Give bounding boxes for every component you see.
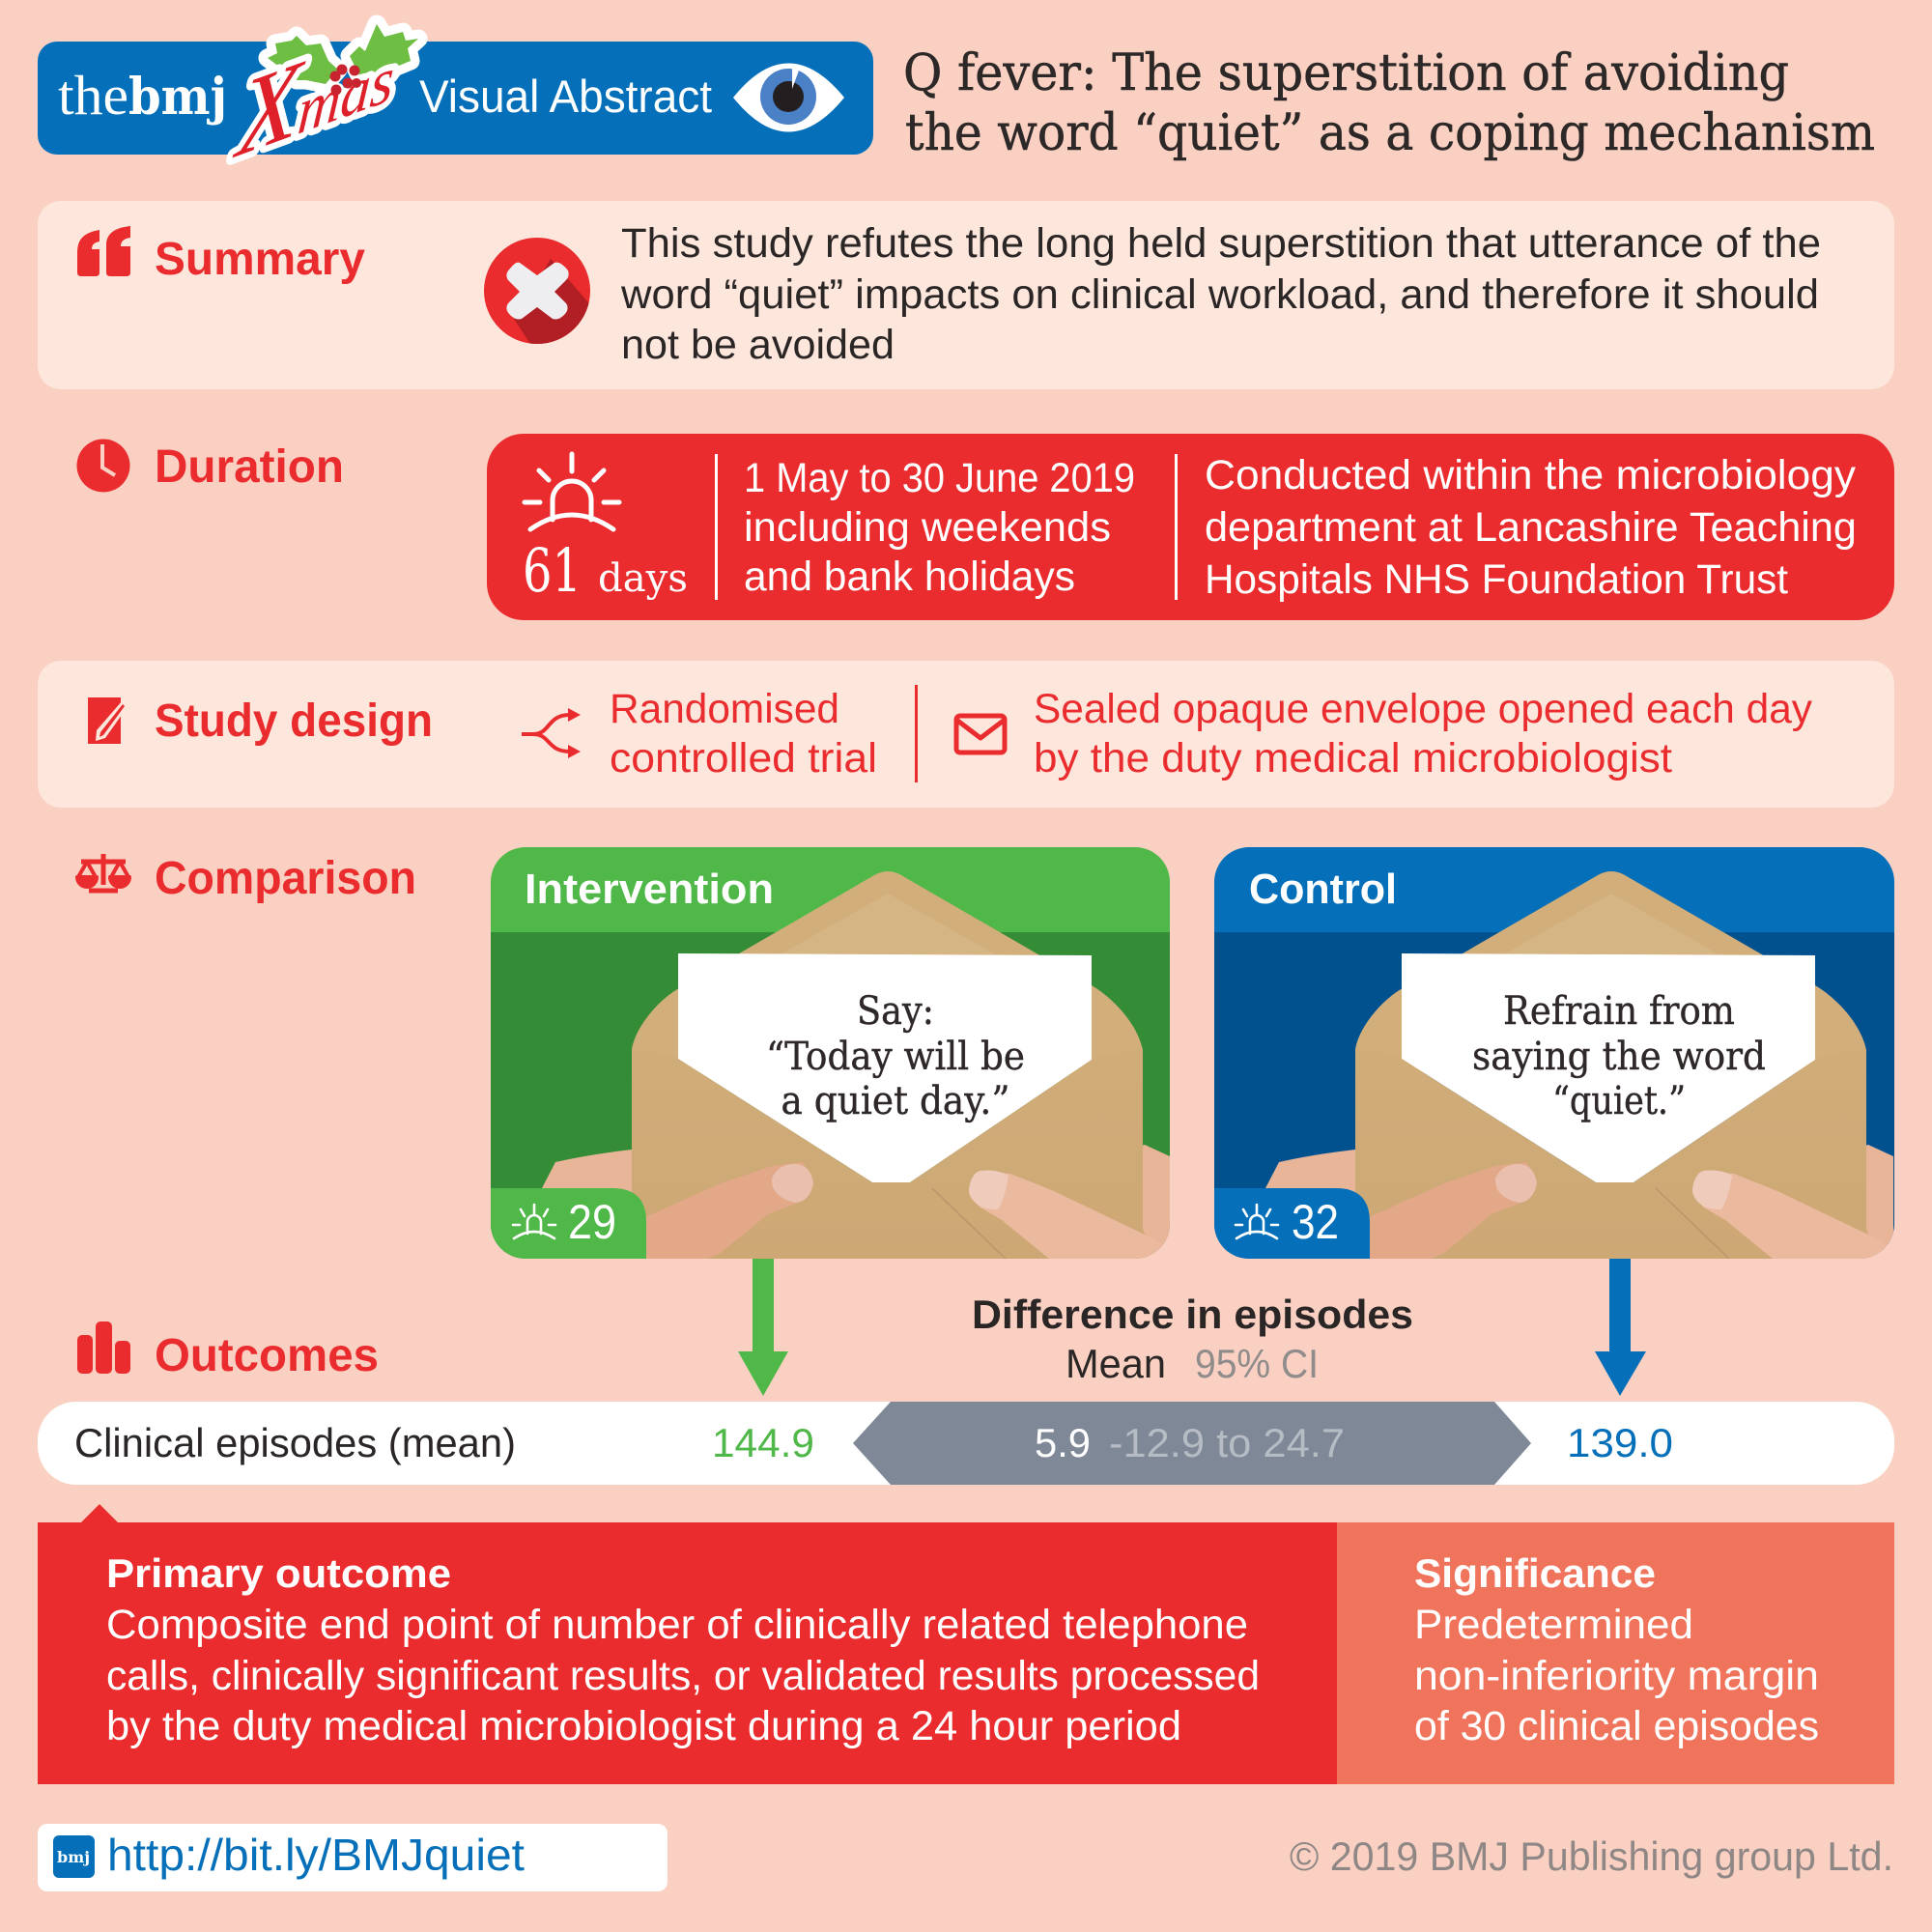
- panel: intervention: [491, 847, 1170, 1259]
- icon: quote marks: [77, 226, 130, 276]
- icon: eye: [733, 64, 844, 131]
- primary outcome text: calls, clinically significant results, or validated results processed: [106, 1653, 1260, 1699]
- panel: duration: days: [598, 556, 688, 601]
- icon: envelope: [956, 716, 1005, 753]
- note text: “quiet.”: [1552, 1079, 1686, 1123]
- randomised text: Randomised: [610, 686, 839, 732]
- title: [903, 44, 1875, 162]
- heading: Comparison: Comparison: [155, 853, 416, 904]
- significance text: Predetermined: [1414, 1602, 1693, 1648]
- difference heading: [972, 1292, 1413, 1386]
- icon: randomisation arrows: [522, 708, 581, 758]
- summary text: [620, 220, 1821, 368]
- dates text: [744, 455, 1135, 600]
- icon: bmj logo: [53, 1835, 95, 1878]
- arrow: control to result: [1595, 1259, 1646, 1396]
- panel: control: [1214, 847, 1894, 1259]
- significance text: of 30 clinical episodes: [1414, 1703, 1819, 1749]
- note text: a quiet day.”: [781, 1079, 1010, 1123]
- envelope photo: [1265, 871, 1893, 1259]
- panel: primary outcome: [38, 1504, 1337, 1784]
- setting text: Hospitals NHS Foundation Trust: [1205, 556, 1788, 603]
- note text: Refrain from: [1503, 989, 1735, 1034]
- days badge: [1214, 1188, 1370, 1259]
- heading: Duration: Duration: [155, 441, 344, 493]
- difference value: -12.9 to 24.7: [1109, 1420, 1345, 1465]
- significance text: non-inferiority margin: [1414, 1653, 1819, 1699]
- significance heading: Significance: [1414, 1550, 1656, 1596]
- 61 days: 61: [523, 535, 582, 606]
- icon: cross: [484, 238, 590, 344]
- arrow: intervention to result: [738, 1259, 788, 1396]
- Visual Abstract label: Visual Abstract: [419, 71, 712, 122]
- note text: [766, 989, 1025, 1123]
- heading: Summary: Summary: [155, 234, 365, 285]
- setting text: Conducted within the microbiology: [1205, 452, 1857, 498]
- panel: significance: [1337, 1522, 1894, 1784]
- control heading: Control: [1249, 866, 1397, 913]
- url: http://bit.ly/BMJquiet: [107, 1830, 525, 1880]
- panel: summary: [38, 201, 1894, 389]
- intervention heading: Intervention: [525, 866, 774, 913]
- control value: 139.0: [1567, 1420, 1673, 1465]
- heading: Outcomes: Outcomes: [155, 1330, 379, 1381]
- copyright: © 2019 BMJ Publishing group Ltd.: [1290, 1833, 1893, 1879]
- randomised text: controlled trial: [610, 735, 877, 781]
- bmj logo: [58, 64, 227, 127]
- note text: saying the word: [1472, 1035, 1766, 1079]
- icon: clock: [77, 439, 129, 493]
- days badge: [491, 1188, 646, 1259]
- note text: “Today will be: [766, 1035, 1025, 1079]
- summary text: word “quiet” impacts on clinical workload, and therefore it should: [620, 271, 1819, 318]
- difference heading: Mean: [1065, 1341, 1166, 1386]
- randomised text: [610, 686, 877, 781]
- link box: [38, 1824, 668, 1891]
- icon: sun: [525, 454, 619, 529]
- difference value: [853, 1402, 1531, 1485]
- heading: Study design: Study design: [155, 696, 433, 747]
- summary text: not be avoided: [621, 322, 895, 368]
- outcome label: Clinical episodes (mean): [74, 1420, 516, 1465]
- icon: scales: [77, 854, 129, 891]
- primary outcome text: by the duty medical microbiologist during a 24 hour period: [106, 1703, 1181, 1749]
- primary outcome text: [106, 1602, 1260, 1749]
- note text: Say:: [857, 989, 934, 1034]
- primary outcome heading: Primary outcome: [106, 1550, 451, 1596]
- bmj logo: the: [58, 64, 128, 127]
- dates text: including weekends: [744, 504, 1111, 551]
- dates text: 1 May to 30 June 2019: [744, 455, 1135, 501]
- note text: [1472, 989, 1766, 1123]
- envelope photo: [542, 871, 1170, 1259]
- summary text: This study refutes the long held superstition that utterance of the: [621, 220, 1821, 267]
- days badge: 32: [1292, 1195, 1339, 1249]
- bmj logo: bmj: [128, 68, 227, 127]
- header banner: [38, 1, 873, 182]
- difference heading: 95% CI: [1195, 1341, 1319, 1386]
- envelope text: by the duty medical microbiologist: [1034, 735, 1672, 781]
- panel: duration: [487, 434, 1894, 620]
- holly berries: [330, 64, 361, 95]
- envelope text: [1034, 686, 1812, 781]
- outcome bar: [38, 1402, 1894, 1485]
- icon: bar chart: [77, 1321, 130, 1374]
- title: Q fever: The superstition of avoiding: [903, 44, 1789, 102]
- difference value: 5.9: [1035, 1420, 1091, 1465]
- intervention value: 144.9: [712, 1420, 814, 1465]
- icon: pencil and pad: [88, 697, 128, 744]
- holly leaves: [268, 24, 418, 84]
- Xmas script: Xmas: [230, 1, 401, 182]
- envelope text: Sealed opaque envelope opened each day: [1034, 686, 1812, 732]
- difference heading: Difference in episodes: [972, 1292, 1413, 1337]
- icon: bmj logo: bmj: [57, 1848, 90, 1866]
- setting text: [1205, 452, 1857, 603]
- days badge: 29: [568, 1195, 616, 1249]
- significance text: [1414, 1602, 1819, 1749]
- dates text: and bank holidays: [744, 554, 1075, 600]
- title: the word “quiet” as a coping mechanism: [905, 104, 1875, 162]
- setting text: department at Lancashire Teaching: [1205, 504, 1857, 551]
- panel: study design: [38, 661, 1894, 808]
- primary outcome text: Composite end point of number of clinically related telephone: [106, 1602, 1248, 1648]
